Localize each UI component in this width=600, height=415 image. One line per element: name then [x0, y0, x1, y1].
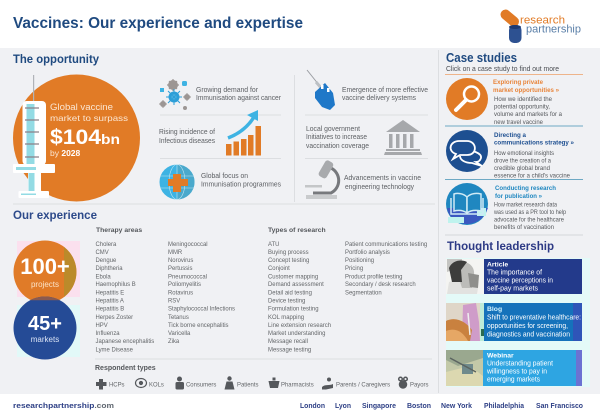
icon: hcps	[96, 379, 106, 390]
case study: communications strategy: communications strategy »	[494, 140, 574, 146]
text: case studies intro: Click on a case study to find out more	[446, 66, 559, 73]
logo	[498, 8, 581, 43]
card: webinar: Understanding patient	[487, 360, 553, 368]
case study: communications strategy: Directing a	[494, 132, 526, 139]
list: types of research: Line extension research	[268, 323, 331, 329]
list: types of research: Detail aid testing	[268, 290, 312, 296]
text: cancer demand	[196, 87, 282, 102]
text: vaccine engineering: Advancements in vaccine	[344, 175, 421, 182]
icon: hand with syringe	[307, 70, 335, 110]
case study: communications strategy: essence for a child's vaccine	[494, 172, 570, 180]
row: respondent types: Consumers	[186, 382, 216, 388]
icon: government building	[384, 120, 422, 155]
card: article	[446, 259, 582, 294]
list: therapy areas: Japanese encephalitis	[96, 339, 154, 345]
case study: publication: benefits of vaccination	[494, 224, 554, 231]
list: types of research: Concept testing	[268, 258, 309, 264]
list: types of research: Segmentation	[345, 290, 382, 296]
list: therapy areas: Poliomyelitis	[168, 282, 201, 288]
list: therapy areas: Zika	[168, 339, 180, 345]
icon: syringe	[13, 75, 55, 198]
panel: market size: market to surpass	[50, 113, 128, 123]
icon: magnifier	[456, 86, 479, 110]
list: therapy areas: Pertussis	[168, 266, 192, 272]
card: blog: diagnostics and vaccination	[487, 332, 570, 338]
heading: respondent types: Respondent types	[95, 365, 156, 372]
list: therapy areas: CMV	[96, 250, 109, 256]
row: respondent types: Payors	[410, 382, 429, 388]
footer: Boston	[407, 401, 431, 410]
icon: pharmacists	[268, 378, 280, 388]
list: types of research: Device testing	[268, 298, 305, 304]
case study: private market: volume and markets for a	[494, 111, 562, 118]
card: article: The importance of	[487, 270, 542, 276]
text: global focus	[201, 173, 282, 188]
list: therapy areas	[96, 227, 235, 354]
case study: publication: How market research data	[494, 202, 557, 208]
list: therapy areas: Cholera	[96, 242, 117, 248]
list: types of research: Formulation testing	[268, 306, 318, 312]
list: types of research: Product profile testing	[345, 274, 402, 280]
logo: research	[520, 14, 565, 26]
case study: private market: How we identified the	[494, 96, 552, 103]
list: types of research: Customer mapping	[268, 274, 318, 280]
icon: microscope	[305, 159, 339, 199]
text: infectious diseases: Rising incidence of	[159, 129, 215, 136]
case study: private market	[446, 78, 562, 126]
heading: thought leadership: Thought leadership	[447, 239, 554, 253]
text: global focus: Global focus on	[201, 173, 248, 180]
row: respondent types: Patients	[237, 382, 258, 388]
icon: parents	[322, 378, 333, 390]
panel: market size	[13, 74, 140, 202]
text: infectious diseases: Infectious diseases	[159, 138, 216, 145]
list: types of research: Positioning	[345, 258, 374, 264]
footer: New York	[441, 401, 473, 410]
stat: markets: 45+	[28, 313, 62, 335]
card: webinar: willingness to pay in	[486, 368, 547, 376]
text: vaccine engineering	[344, 175, 421, 191]
stat: projects	[14, 240, 80, 304]
list: therapy areas: Hepatitis B	[96, 306, 124, 312]
panel: market size: by 2028	[50, 148, 81, 158]
case study: publication: for publication »	[495, 193, 542, 200]
row: respondent types: HCPs	[109, 382, 125, 388]
list: therapy areas: Tetanus	[168, 315, 189, 321]
card: blog	[446, 303, 582, 341]
list: types of research: Pricing	[345, 266, 363, 272]
footer: Lyon	[335, 401, 351, 410]
case study: private market: market opportunities »	[493, 87, 559, 94]
list: therapy areas: Ebola	[96, 274, 111, 280]
list: therapy areas: HPV	[96, 323, 108, 329]
list: types of research: Secondary / desk research	[345, 282, 416, 288]
card: webinar: Webinar	[487, 352, 514, 360]
list: therapy areas: Meningococcal	[168, 242, 208, 248]
image: vaccination photo	[446, 303, 485, 341]
row: respondent types	[96, 376, 429, 390]
panel: market size: $104	[50, 126, 101, 149]
list: types of research: Conjoint	[268, 266, 290, 272]
footer: researchpartnership .com	[13, 401, 114, 410]
image: money and stethoscope	[446, 350, 483, 386]
footer: San Francisco	[536, 401, 583, 410]
list: types of research: Types of research	[268, 227, 326, 234]
icon: speech bubbles	[451, 141, 482, 166]
stat: projects: projects	[31, 280, 59, 289]
card: blog: Blog	[487, 306, 502, 313]
logo: partnership	[526, 24, 581, 36]
icon: patients	[224, 376, 234, 390]
list: therapy areas: Hepatitis E	[96, 290, 124, 296]
list: types of research	[268, 227, 427, 354]
case study: communications strategy	[446, 130, 574, 180]
case study: publication: advocate for the healthcare	[494, 216, 564, 224]
row: respondent types: KOLs	[149, 382, 164, 388]
list: therapy areas: Hepatitis A	[96, 298, 124, 304]
text: local government: Initiatives to increase	[306, 134, 367, 141]
case study: private market: new travel vaccine	[494, 119, 543, 126]
panel: market size: Global vaccine	[50, 102, 113, 112]
card: article: Article	[487, 262, 508, 268]
heading: our experience: Our experience	[13, 210, 97, 222]
list: therapy areas: RSV	[168, 298, 180, 304]
icon: globe with cross	[160, 164, 194, 200]
list: types of research: Buying process	[268, 250, 309, 256]
footer: London	[300, 401, 325, 410]
list: types of research: ATU	[268, 242, 279, 248]
text: delivery systems: vaccine delivery systems	[342, 95, 417, 102]
stat: markets: markets	[31, 335, 59, 344]
icon: payors	[399, 377, 407, 388]
list: therapy areas: MMR	[168, 250, 183, 256]
list: types of research: Demand assessment	[268, 282, 324, 288]
icon: open book	[451, 193, 483, 214]
case study: communications strategy: credible global brand	[494, 165, 550, 172]
list: therapy areas: Varicella	[168, 331, 191, 337]
list: therapy areas: Herpes Zoster	[96, 315, 133, 321]
footer: Philadelphia	[484, 401, 525, 410]
text: cancer demand: Immunisation against cancer	[196, 95, 282, 102]
list: therapy areas: Tick borne encephalitis	[168, 323, 229, 329]
list: therapy areas: Staphylococcal Infections	[168, 306, 235, 312]
card: blog: Shift to preventative healthcare:	[487, 314, 581, 322]
text: vaccine engineering: engineering technology	[345, 184, 415, 191]
case study: publication: Conducting research	[495, 185, 556, 192]
list: therapy areas: Rotavirus	[168, 290, 193, 296]
list: therapy areas: Influenza	[96, 331, 120, 337]
list: therapy areas: Dengue	[96, 258, 117, 264]
case study: publication: was used as a PR tool to help	[493, 209, 566, 216]
list: types of research: Portfolio analysis	[345, 250, 390, 256]
heading: the opportunity: The opportunity	[13, 54, 100, 66]
text: delivery systems	[342, 87, 428, 102]
card: webinar	[446, 350, 582, 386]
text: local government: Local government	[306, 126, 360, 133]
list: therapy areas: Diphtheria	[96, 266, 123, 272]
case study: communications strategy: drove the creation of a	[494, 158, 551, 164]
card: webinar: emerging markets	[487, 376, 541, 384]
list: types of research: Patient communications testing	[345, 242, 427, 248]
list: types of research: Market understanding	[268, 331, 325, 337]
case study: publication	[446, 183, 566, 231]
list: therapy areas: Haemophilus B	[96, 282, 136, 288]
case study: communications strategy: How emotional insights	[494, 150, 554, 157]
card: article: self-pay markets	[487, 286, 539, 292]
case study: private market: Exploring private	[493, 79, 543, 86]
heading: case studies: Case studies	[446, 50, 517, 65]
list: therapy areas: Pneumococcal	[168, 274, 207, 280]
list: types of research: Message testing	[268, 348, 311, 354]
text: local government	[306, 126, 369, 150]
list: therapy areas: Therapy areas	[96, 227, 142, 234]
footer: Singapore	[362, 401, 396, 410]
icon: cancer cells	[159, 79, 191, 110]
text: cancer demand: Growing demand for	[196, 87, 259, 94]
title: Vaccines: Our experience and expertise	[13, 15, 303, 32]
icon: rising bar chart	[226, 110, 261, 156]
stat: projects: 100+	[20, 254, 70, 279]
list: therapy areas: Lyme Disease	[96, 348, 134, 354]
image: woman thinking	[446, 259, 484, 294]
icon: consumers	[176, 376, 184, 390]
card: blog: opportunities for screening,	[487, 323, 568, 330]
text: global focus: Immunisation programmes	[201, 182, 282, 188]
icon: kols	[136, 378, 146, 388]
text: infectious diseases	[159, 129, 216, 145]
row: respondent types: Pharmacists	[281, 382, 314, 388]
text: local government: vaccination coverage	[306, 143, 369, 150]
card: article: vaccine perceptions in	[487, 278, 553, 284]
list: types of research: Message recall	[268, 339, 308, 345]
list: types of research: KOL mapping	[268, 315, 304, 321]
text: delivery systems: Emergence of more effective	[342, 87, 428, 94]
case study: private market: potential opportunity,	[494, 104, 550, 110]
stat: markets	[14, 296, 80, 360]
panel: market size: bn	[101, 131, 120, 147]
list: therapy areas: Norovirus	[168, 258, 193, 264]
footer	[13, 401, 583, 410]
row: respondent types: Parents / Caregivers	[336, 382, 390, 388]
